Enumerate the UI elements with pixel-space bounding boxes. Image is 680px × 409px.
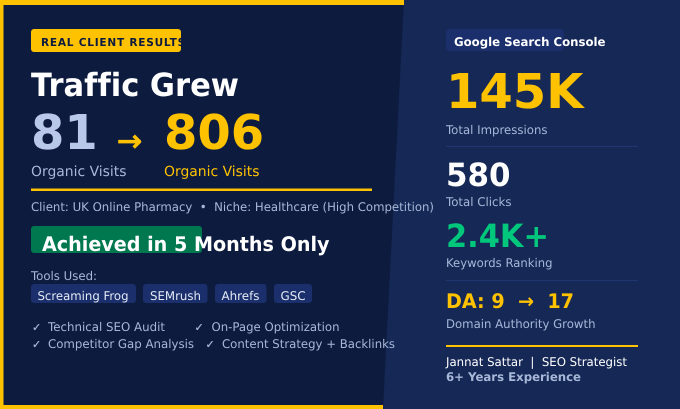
- callout: achieved in 5 months: Achieved in 5 Months Only: [42, 232, 330, 256]
- stat: after visits: Organic Visits: [164, 164, 260, 180]
- checklist: ✓: [206, 338, 215, 351]
- badge: google search console: [446, 29, 606, 51]
- stat: domain authority: Domain Authority Growth: [446, 317, 596, 331]
- tools used: [30, 269, 312, 303]
- tool: Ahrefs: [215, 284, 266, 303]
- checklist: ✓: [194, 321, 204, 334]
- title: Traffic Grew: [31, 66, 239, 104]
- stat: before visits: Organic Visits: [31, 164, 126, 180]
- stat: clicks: 580: [446, 156, 510, 194]
- stat: before visits: [31, 105, 126, 180]
- tool: Screaming Frog: [31, 284, 136, 303]
- badge: google search console: Google Search Console: [454, 35, 606, 49]
- badge: real client results: [31, 29, 186, 52]
- stat: before visits: 81: [31, 105, 98, 161]
- author credit: [445, 355, 627, 384]
- tools used: Tools Used:: [30, 269, 97, 283]
- checklist: Competitor Gap Analysis: [48, 337, 194, 351]
- tool: GSC: [274, 284, 312, 303]
- stat: after visits: 806: [164, 105, 264, 161]
- tool: GSC: GSC: [280, 289, 306, 303]
- stat: impressions: 145K: [446, 64, 585, 120]
- panel: left results: [0, 0, 404, 409]
- checklist: ✓: [32, 338, 41, 351]
- tool: SEMrush: SEMrush: [150, 289, 201, 303]
- checklist: On-Page Optimization: [212, 320, 340, 334]
- checklist: Technical SEO Audit: [47, 320, 165, 334]
- checklist: Content Strategy + Backlinks: [222, 337, 395, 351]
- arrow: →: [117, 124, 142, 159]
- stat: clicks: Total Clicks: [445, 195, 512, 209]
- checklist: [32, 320, 395, 351]
- badge: real client results: REAL CLIENT RESULTS: [41, 36, 186, 49]
- checklist: ✓: [32, 321, 41, 334]
- stat: impressions: Total Impressions: [445, 123, 548, 137]
- stat: domain authority: [446, 289, 596, 331]
- tool: SEMrush: [143, 284, 208, 303]
- tool: Screaming Frog: Screaming Frog: [38, 289, 128, 303]
- stat: keywords: 2.4K+: [446, 217, 549, 255]
- stat: domain authority: DA: 9 → 17: [446, 289, 574, 313]
- author credit: 6+ Years Experience: [446, 370, 581, 384]
- stat: clicks: [445, 156, 512, 209]
- stat: keywords: Keywords Ranking: [446, 256, 552, 270]
- tool: Ahrefs: Ahrefs: [222, 289, 260, 303]
- author credit: Jannat Sattar | SEO Strategist: [445, 355, 627, 369]
- client and niche line: Client: UK Online Pharmacy • Niche: Healthcare (High Competition): [31, 200, 434, 214]
